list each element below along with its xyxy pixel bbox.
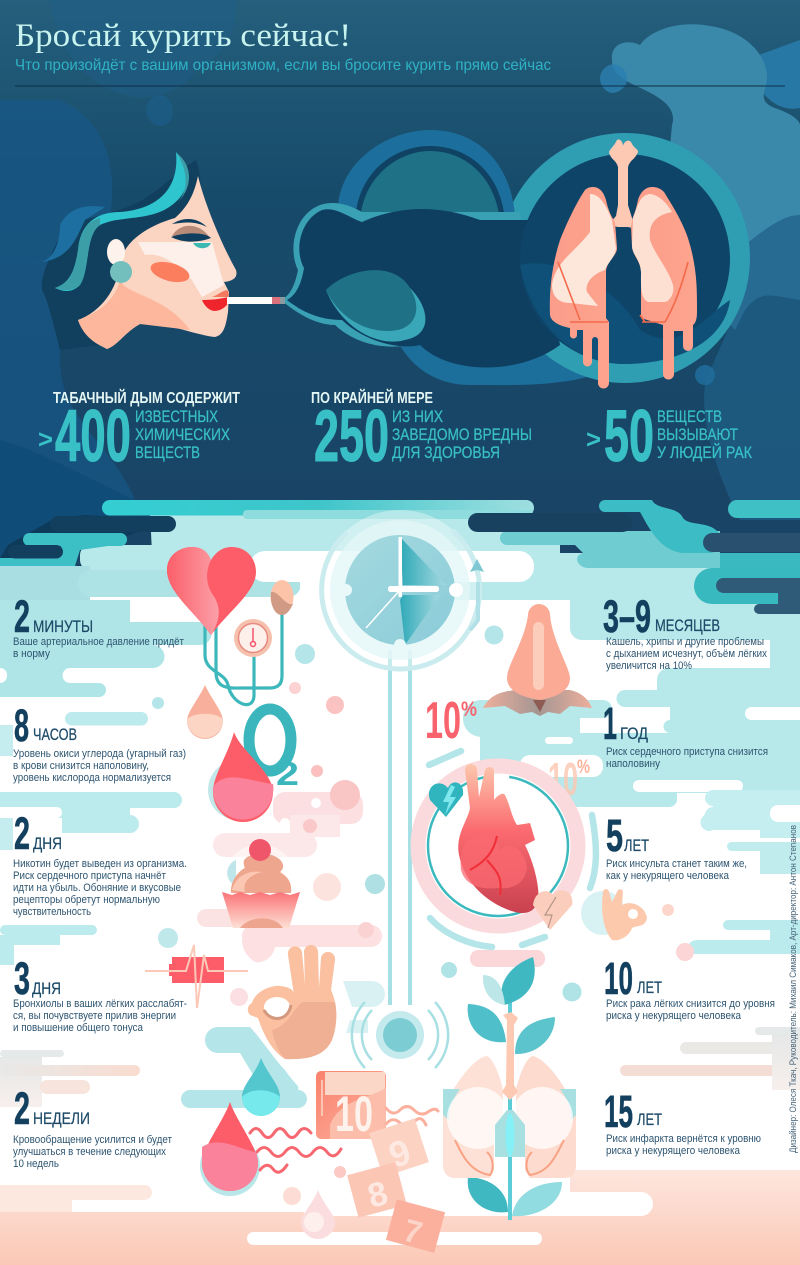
milestone: 8 hours: Уровень окиси углерода (угарный газ): [13, 748, 186, 760]
milestone: 15 years: риска у некурящего человека: [606, 1145, 741, 1157]
10 percent red: 10: [425, 692, 461, 750]
cigarette: [227, 297, 285, 304]
milestone: 2 minutes: МИНУТЫ: [33, 617, 93, 636]
calendar tiles 9 8 7: 9: [384, 1131, 416, 1176]
milestone: 2 weeks: 2: [14, 1083, 30, 1134]
milestone: 2 minutes: 2: [14, 591, 30, 642]
earring: [110, 261, 132, 283]
white main area with pale clouds: [0, 512, 800, 1265]
milestone: 8 hours: 8: [14, 700, 29, 751]
icon: cyan drop: [242, 1058, 280, 1116]
clock: [320, 510, 484, 670]
lung veins: [558, 262, 688, 322]
milestone: 8 hours: ЧАСОВ: [33, 725, 77, 744]
milestone: 5 years: Риск инсульта станет таким же,: [606, 858, 747, 870]
teal hair swoosh: [55, 152, 187, 291]
milestone: 2 days: Никотин будет выведен из организма.: [13, 858, 187, 870]
icon: nose: [483, 604, 592, 716]
icon: OK hand: [248, 945, 336, 1059]
milestone: 3-9 months: Кашель, хрипы и другие проблемы: [606, 636, 764, 648]
calendar tiles 9 8 7: 7: [400, 1212, 426, 1251]
milestone: 3 days: Бронхиолы в ваших лёгких расслабят-: [13, 998, 187, 1010]
bulb: [270, 580, 294, 615]
milestone: 3-9 months: [603, 591, 767, 672]
jaw shadow: [78, 280, 190, 349]
ear: [107, 239, 125, 265]
small ok hand: [581, 889, 647, 940]
milestone: 3 days: 3: [14, 953, 30, 1004]
stat: 50 carcinogens: 50: [604, 396, 654, 477]
milestone: 2 days: [13, 808, 187, 918]
milestone: 2 weeks: НЕДЕЛИ: [33, 1109, 90, 1128]
milestone: 3 days: и повышение общего тонуса: [13, 1022, 144, 1034]
milestone: 2 weeks: [13, 1083, 172, 1170]
milestone: 2 days: рецепторы обретут нормальную: [13, 894, 160, 906]
icon: blood drop: [208, 732, 273, 822]
milestone: 8 hours: уровень кислорода нормализуется: [13, 772, 171, 784]
icon: heart with tonometer: [167, 547, 294, 705]
milestone: 2 days: идти на убыль. Обоняние и вкусовые: [13, 882, 181, 894]
bottom peach: [0, 1170, 800, 1265]
smoke cloud: [281, 130, 750, 385]
eye: [171, 219, 211, 248]
anatomical heart: [458, 764, 538, 913]
stat: 50 carcinogens: У ЛЮДЕЙ РАК: [657, 443, 752, 462]
milestone: 1 year: наполовину: [606, 758, 660, 770]
cheek blush: [148, 258, 192, 286]
stat: 250 harmful: ДЛЯ ЗДОРОВЬЯ: [392, 444, 500, 462]
left lung: [550, 187, 617, 389]
stat: 250 harmful: ПО КРАЙНЕЙ МЕРЕ: [311, 389, 433, 407]
stat: 250 harmful: 250: [314, 396, 389, 477]
milestone: 2 minutes: Ваше артериальное давление придёт: [13, 636, 184, 648]
milestone: 3-9 months: увеличится на 10%: [606, 660, 692, 672]
milestone: 2 weeks: улучшаться в течение следующих: [13, 1146, 166, 1158]
wavy transition bands: [0, 500, 800, 614]
milestone: 3 days: [13, 953, 187, 1034]
circles decor: [152, 626, 694, 1205]
milestone: 2 weeks: 10 недель: [13, 1158, 59, 1170]
stat: 50 carcinogens: >: [586, 424, 601, 454]
central timeline stem: [388, 650, 412, 1005]
plant lungs right: [516, 1056, 576, 1178]
milestone: 2 minutes: в норму: [13, 648, 50, 660]
milestone: 2 weeks: Кровообращение усилится и будет: [13, 1134, 172, 1146]
blue lock: [31, 206, 105, 263]
icon: calendar with number 10: [316, 1071, 386, 1142]
milestone: 8 hours: в крови снизится наполовину,: [13, 760, 149, 772]
calendar tiles 9 8 7: [347, 1118, 445, 1256]
stat: 400 chemicals: >: [38, 424, 53, 454]
stat: 400 chemicals: [38, 389, 240, 477]
milestone: 1 year: 1: [603, 698, 617, 749]
icon: pink drop: [301, 1190, 335, 1239]
milestone: 3 days: ся, вы почувствуете прилив энергии: [13, 1010, 176, 1022]
milestone: 5 years: 5: [606, 810, 623, 861]
10 percent pale: %: [577, 757, 590, 778]
stat: 400 chemicals: ИЗВЕСТНЫХ: [135, 408, 218, 426]
broken heart peach: [533, 890, 572, 930]
milestone: 10 years: риска у некурящего человека: [606, 1010, 742, 1022]
lips: [202, 297, 229, 311]
credits: Дизайнер: Олеся Ткач, Руководитель: Михаил Симаков, Арт-директор: Антон Степанов: [788, 825, 799, 1153]
pendulum: [352, 1002, 448, 1068]
stat: 400 chemicals: ВЕЩЕСТВ: [135, 444, 200, 462]
woman smoking: [31, 152, 285, 350]
plant lungs left: [443, 1056, 503, 1178]
milestone: 3-9 months: МЕСЯЦЕВ: [655, 616, 720, 635]
milestone: 2 days: Риск сердечного приступа начнёт: [13, 870, 166, 882]
icon: peach drop: [187, 685, 223, 739]
icon: battery with ECG: [145, 945, 248, 1008]
stat: 400 chemicals: ТАБАЧНЫЙ ДЫМ СОДЕРЖИТ: [53, 389, 240, 407]
milestone: 10 years: Риск рака лёгких снизится до уровня: [606, 998, 775, 1010]
10 percent pale: 10: [548, 753, 578, 805]
milestone: 2 minutes: [13, 591, 184, 660]
band light teal body: [150, 512, 800, 668]
milestone: 3-9 months: 3–9: [603, 591, 651, 642]
broken heart teal: [429, 782, 463, 817]
milestone: 3-9 months: с дыханием исчезнут, объём лёгких: [606, 648, 767, 660]
right clouds: [616, 668, 800, 707]
stat: 250 harmful: ЗАВЕДОМО ВРЕДНЫ: [392, 426, 532, 444]
lungs in smoke: [550, 139, 697, 389]
tubes: [205, 612, 282, 705]
stat: 400 chemicals: 400: [55, 396, 131, 477]
milestone: 10 years: ЛЕТ: [637, 978, 662, 997]
calendar tiles 9 8 7: 8: [364, 1174, 392, 1216]
milestone: 15 years: [604, 1086, 761, 1157]
peach squiggles: [386, 1106, 438, 1126]
stat: 50 carcinogens: [586, 396, 752, 477]
milestone: 1 year: Риск сердечного приступа снизится: [606, 746, 768, 758]
milestone: 5 years: ЛЕТ: [624, 836, 649, 855]
heart: [167, 547, 256, 635]
stat: 50 carcinogens: ВЫЗЫВАЮТ: [657, 426, 738, 444]
10 percent red: %: [461, 698, 477, 721]
icon: calendar with number 10: 10: [335, 1086, 373, 1142]
icon: second blood drop with waves: [200, 1102, 341, 1196]
milestone: 3 days: ДНЯ: [32, 979, 61, 998]
milestone: 2 days: 2: [14, 808, 30, 859]
gauge: [234, 619, 272, 657]
milestone: 10 years: 10: [604, 953, 633, 1004]
icon: O2: [249, 709, 299, 792]
milestone: 10 years: [604, 953, 775, 1022]
milestone: 5 years: [606, 810, 747, 882]
pale pink and teal clouds around icons: [273, 792, 363, 824]
stat: 50 carcinogens: ВЕЩЕСТВ: [657, 408, 722, 426]
stat: 250 harmful: ИЗ НИХ: [392, 408, 443, 426]
stat: 400 chemicals: ХИМИЧЕСКИХ: [135, 426, 230, 444]
icon: lungs with plant: [443, 957, 576, 1220]
squiggles: [250, 1128, 341, 1172]
left clouds: [0, 600, 212, 697]
clock arrow: [470, 559, 484, 630]
right lung: [631, 187, 697, 380]
milestone: 15 years: 15: [604, 1086, 633, 1137]
dark header background: [0, 0, 800, 640]
milestone: 5 years: как у некурящего человека: [606, 870, 730, 882]
hair dark: [42, 160, 200, 350]
cheek highlight: [138, 242, 224, 297]
milestone: 8 hours: [13, 700, 186, 784]
milestone: 1 year: [603, 698, 768, 770]
icon: O2: 2: [276, 755, 299, 792]
heart with rings: [418, 751, 647, 947]
trachea: [608, 139, 640, 230]
milestone: 15 years: Риск инфаркта вернётся к уровню: [606, 1133, 761, 1145]
subtitle: Что произойдёт с вашим организмом, если вы бросите курить прямо сейчас: [15, 57, 551, 74]
milestone: 15 years: ЛЕТ: [637, 1110, 662, 1129]
icon: cupcake: [222, 839, 300, 928]
face: [78, 176, 236, 349]
right lung highlight: [632, 194, 673, 302]
title: Бросай курить сейчас!: [15, 18, 351, 54]
milestone: 2 days: ДНЯ: [33, 834, 62, 853]
milestone: 2 days: чувствительность: [13, 906, 91, 918]
stat: 250 harmful: [311, 389, 532, 477]
milestone: 1 year: ГОД: [620, 724, 648, 743]
left lung highlight: [552, 194, 616, 306]
